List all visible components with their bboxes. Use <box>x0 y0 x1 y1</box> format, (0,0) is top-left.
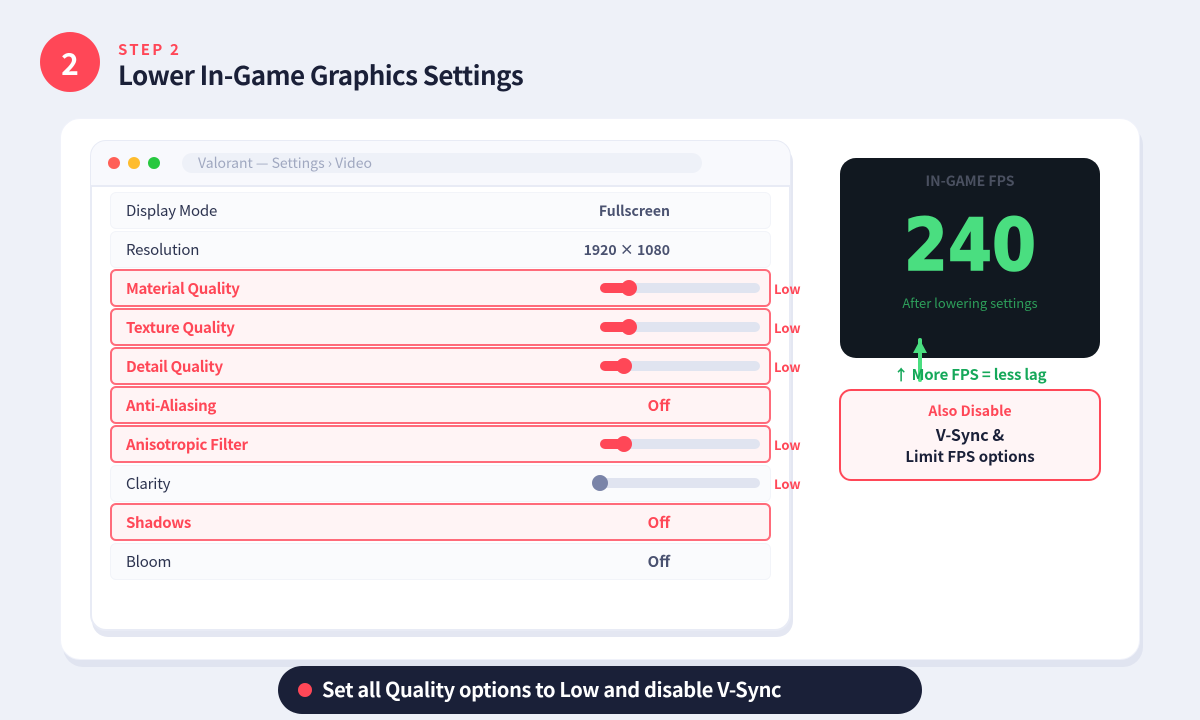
value: 1920 x 1080: 1920 × 1080 <box>584 240 670 260</box>
value: Fullscreen: Fullscreen <box>599 201 670 221</box>
panel: settings window <box>90 140 791 631</box>
callout: also disable <box>839 389 1101 481</box>
label: Clarity: Clarity <box>126 473 170 494</box>
label: Anisotropic Filter: Anisotropic Filter <box>126 434 248 455</box>
slider knob: Material Quality <box>621 280 637 296</box>
address bar <box>182 153 702 173</box>
label: Display Mode: Display Mode <box>126 200 217 221</box>
slider knob: Anisotropic Filter <box>616 436 632 452</box>
bottom banner <box>278 666 922 714</box>
arrow: up <box>913 338 927 382</box>
step badge: 2 <box>61 40 79 84</box>
value: Off: Off <box>648 512 670 533</box>
slider track: Clarity <box>600 478 760 488</box>
label: Shadows: Shadows <box>126 512 191 533</box>
slider track: Anisotropic Filter <box>600 439 760 449</box>
setting row: Anisotropic Filter <box>110 425 771 463</box>
value: Low: Low <box>774 435 801 454</box>
slider track: Material Quality <box>600 283 760 293</box>
icon: maximize dot <box>148 157 160 169</box>
slider fill: Material Quality <box>600 283 629 293</box>
panel: FPS counter <box>840 158 1100 358</box>
slider track: Texture Quality <box>600 322 760 332</box>
setting row: Detail Quality <box>110 347 771 385</box>
label: Texture Quality: Texture Quality <box>126 317 235 338</box>
callout heading: Also Disable <box>928 401 1012 421</box>
setting row: Material Quality <box>110 269 771 307</box>
FPS heading: IN-GAME FPS <box>925 171 1014 191</box>
label: Resolution: Resolution <box>126 239 199 260</box>
banner text: Set all Quality options to Low and disable V-Sync <box>322 674 781 703</box>
label: Bloom: Bloom <box>126 551 171 572</box>
title: Lower In-Game Graphics Settings <box>118 56 523 93</box>
label: Material Quality: Material Quality <box>126 278 240 299</box>
setting row: Bloom <box>110 543 771 580</box>
slider fill: Anisotropic Filter <box>600 439 624 449</box>
value: Low: Low <box>774 279 801 298</box>
value: Low: Low <box>774 357 801 376</box>
slider knob: Texture Quality <box>621 319 637 335</box>
step badge <box>40 32 100 92</box>
slider track: Detail Quality <box>600 361 760 371</box>
value: Low: Low <box>774 474 801 493</box>
FPS note: ↑ More FPS = less lag <box>894 364 1046 385</box>
value: Off: Off <box>648 551 670 572</box>
step label: STEP 2 <box>118 39 181 60</box>
setting row: Anti-Aliasing <box>110 386 771 424</box>
slider fill: Detail Quality <box>600 361 624 371</box>
callout text line 2: Limit FPS options <box>905 446 1035 467</box>
value: Low: Low <box>774 318 801 337</box>
setting row: Texture Quality <box>110 308 771 346</box>
callout text line 1: V-Sync & <box>936 422 1004 446</box>
FPS number: 240 <box>904 203 1036 287</box>
value: Off: Off <box>648 395 670 416</box>
slider knob: Clarity <box>592 475 608 491</box>
setting row: Resolution <box>110 231 771 268</box>
window title bar <box>91 141 790 187</box>
label: Detail Quality: Detail Quality <box>126 356 223 377</box>
setting row: Shadows <box>110 503 771 541</box>
slider knob: Detail Quality <box>616 358 632 374</box>
icon: minimize dot <box>128 157 140 169</box>
icon: banner dot <box>298 683 312 697</box>
setting row: Clarity <box>110 465 771 502</box>
FPS caption: After lowering settings <box>902 293 1038 312</box>
panel: main card <box>60 118 1140 660</box>
address text: Valorant — Settings › Video <box>198 153 372 173</box>
slider fill: Texture Quality <box>600 322 629 332</box>
label: Anti-Aliasing: Anti-Aliasing <box>126 395 216 416</box>
icon: close dot <box>108 157 120 169</box>
setting row: Display Mode <box>110 192 771 229</box>
